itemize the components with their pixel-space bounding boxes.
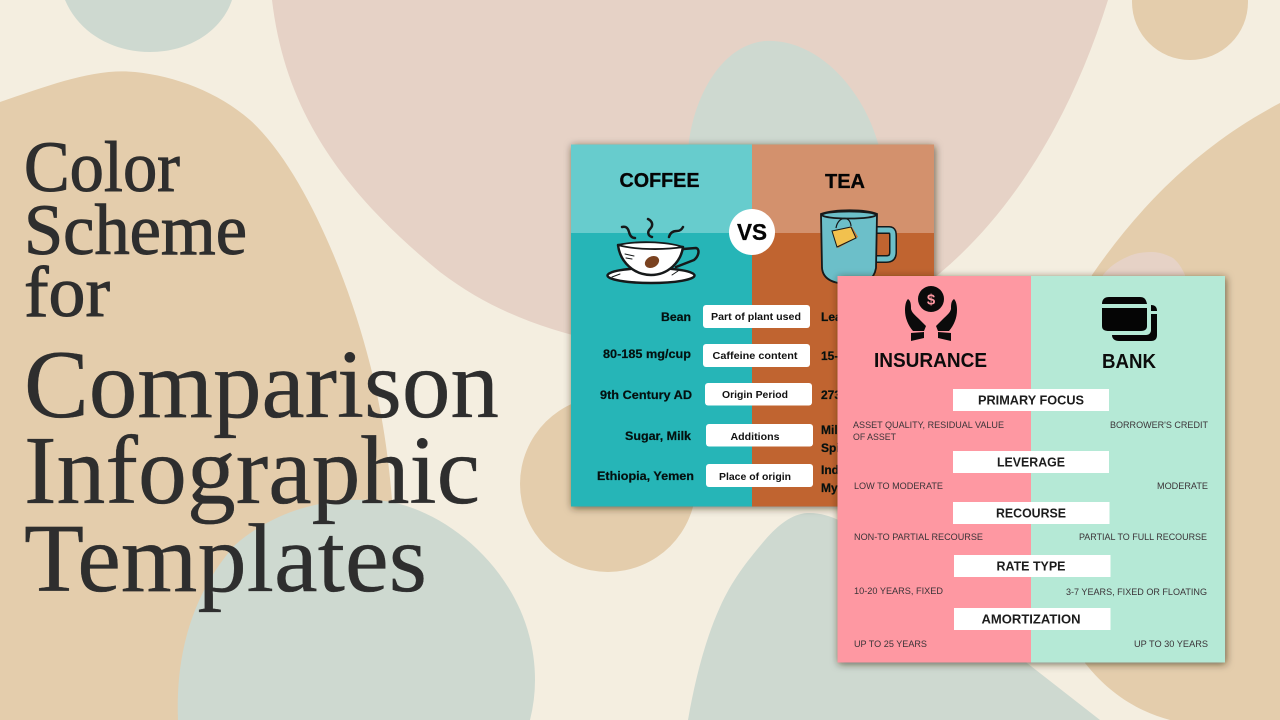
vs badge: VS [737, 219, 767, 245]
row: amortization: UP TO 30 YEARS [1134, 639, 1208, 649]
tea heading: TEA [825, 171, 865, 193]
row: origin period: 9th Century AD [600, 388, 692, 402]
row: additions [625, 423, 894, 455]
vs badge [729, 209, 775, 255]
row: amortization: UP TO 25 YEARS [854, 639, 927, 649]
title: Scheme [24, 190, 247, 270]
row: recourse: PARTIAL TO FULL RECOURSE [1079, 532, 1207, 542]
row: rate type: 10-20 YEARS, FIXED [854, 586, 943, 596]
row: recourse: NON-TO PARTIAL RECOURSE [854, 532, 983, 542]
row: amortization: AMORTIZATION [982, 612, 1080, 626]
row: additions: Additions [730, 431, 780, 443]
title: Color [24, 127, 180, 207]
icon: tea mug [821, 210, 893, 284]
row: caffeine content: 15-70 mg/cup [821, 349, 898, 363]
row: place of origin: Myanmar [821, 481, 874, 495]
row: leverage: MODERATE [1157, 481, 1208, 491]
row: rate type: 3-7 YEARS, FIXED OR FLOATING [1066, 587, 1207, 597]
row: origin period [600, 383, 869, 406]
row: place of origin: Place of origin [719, 471, 791, 483]
insurance heading: INSURANCE [874, 350, 987, 372]
row: recourse [854, 502, 1207, 542]
title [24, 127, 499, 613]
row: primary focus: PRIMARY FOCUS [978, 392, 1084, 408]
row: part of plant used: Bean [661, 310, 691, 324]
row: caffeine content [603, 344, 898, 367]
icon: hands with dollar coin [905, 286, 957, 341]
row: leverage: LOW TO MODERATE [854, 481, 943, 491]
row: part of plant used: Leaves [821, 310, 862, 324]
row: place of origin [597, 463, 892, 495]
row: place of origin: India, China, [821, 463, 892, 477]
row: primary focus: OF ASSET [853, 432, 896, 442]
title: Infographic [24, 417, 480, 525]
row: part of plant used: Part of plant used [711, 311, 801, 323]
coffee heading: COFFEE [620, 170, 700, 192]
bank heading: BANK [1102, 351, 1157, 373]
row: caffeine content: 80-185 mg/cup [603, 347, 691, 361]
row: rate type: RATE TYPE [996, 558, 1066, 574]
title: Comparison [24, 331, 499, 439]
icon: hands with dollar coin: $ [927, 292, 936, 308]
icon: coffee cup [608, 219, 698, 283]
title: for [24, 252, 110, 332]
row: leverage [854, 451, 1208, 491]
title: Templates [24, 505, 427, 613]
row: additions: Sugar, Milk [625, 429, 691, 443]
row: additions: Spices [821, 441, 860, 455]
row: primary focus [853, 389, 1208, 442]
row: leverage: LEVERAGE [997, 454, 1065, 470]
row: place of origin: Ethiopia, Yemen [597, 469, 694, 483]
row: part of plant used [661, 305, 862, 328]
row: primary focus: ASSET QUALITY, RESIDUAL VALUE [853, 420, 1004, 430]
row: amortization [854, 608, 1208, 649]
row: primary focus: BORROWER'S CREDIT [1110, 420, 1208, 430]
row: additions: Milk, Lemon, [821, 423, 894, 437]
panel: insurance vs bank [838, 276, 1225, 662]
row: recourse: RECOURSE [996, 506, 1066, 520]
icon: bank cards [1102, 297, 1157, 341]
panel: coffee vs tea [571, 144, 934, 506]
row: caffeine content: Caffeine content [712, 350, 798, 362]
row: origin period: Origin Period [722, 389, 788, 401]
row: rate type [854, 555, 1207, 597]
row: origin period: 2737 BC [821, 388, 869, 402]
